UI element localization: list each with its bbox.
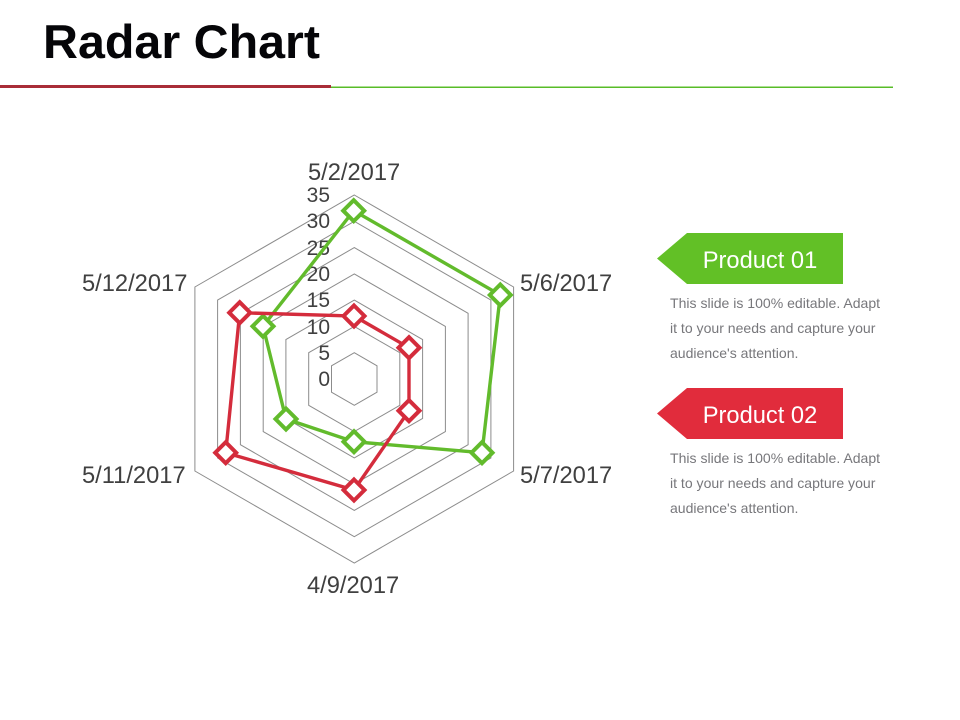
- axis value labels: 15: [307, 289, 330, 312]
- category labels: 5/6/2017: [520, 271, 612, 297]
- axis value labels: 20: [307, 263, 330, 286]
- category labels: 5/12/2017: [82, 271, 187, 297]
- radar chart: [82, 160, 612, 599]
- series: Product 01 (green): [252, 200, 511, 463]
- axis value labels: 10: [307, 316, 330, 339]
- category labels: 5/2/2017: [308, 160, 400, 186]
- category labels: 4/9/2017: [307, 573, 399, 599]
- title: Radar Chart: [43, 15, 320, 68]
- description: Product 01: [670, 295, 880, 361]
- axis value labels: [307, 184, 330, 391]
- description: Product 01: audience's attention.: [670, 345, 798, 361]
- axis value labels: 30: [307, 210, 330, 233]
- description: Product 01: it to your needs and capture your: [670, 320, 876, 336]
- description: Product 02: audience's attention.: [670, 500, 798, 516]
- tag: Product 02: Product 02: [703, 403, 817, 429]
- category labels: 5/11/2017: [82, 463, 186, 489]
- tag: Product 01: Product 01: [703, 248, 817, 274]
- category labels: [82, 160, 612, 599]
- axis value labels: 0: [318, 368, 330, 391]
- category labels: 5/7/2017: [520, 463, 612, 489]
- description: Product 02: [670, 450, 880, 516]
- radar grid rings: [195, 195, 514, 563]
- axis value labels: 25: [307, 237, 330, 260]
- legend: Product 02: [657, 388, 880, 516]
- description: Product 02: This slide is 100% editable. Adapt: [670, 450, 880, 466]
- tag: Product 02: [657, 388, 843, 439]
- description: Product 02: it to your needs and capture your: [670, 475, 876, 491]
- legend: Product 01: [657, 233, 880, 361]
- axis value labels: 5: [318, 342, 330, 365]
- axis value labels: 35: [307, 184, 330, 207]
- tag: Product 01: [657, 233, 843, 284]
- description: Product 01: This slide is 100% editable. Adapt: [670, 295, 880, 311]
- series: Product 02 (red): [215, 302, 420, 500]
